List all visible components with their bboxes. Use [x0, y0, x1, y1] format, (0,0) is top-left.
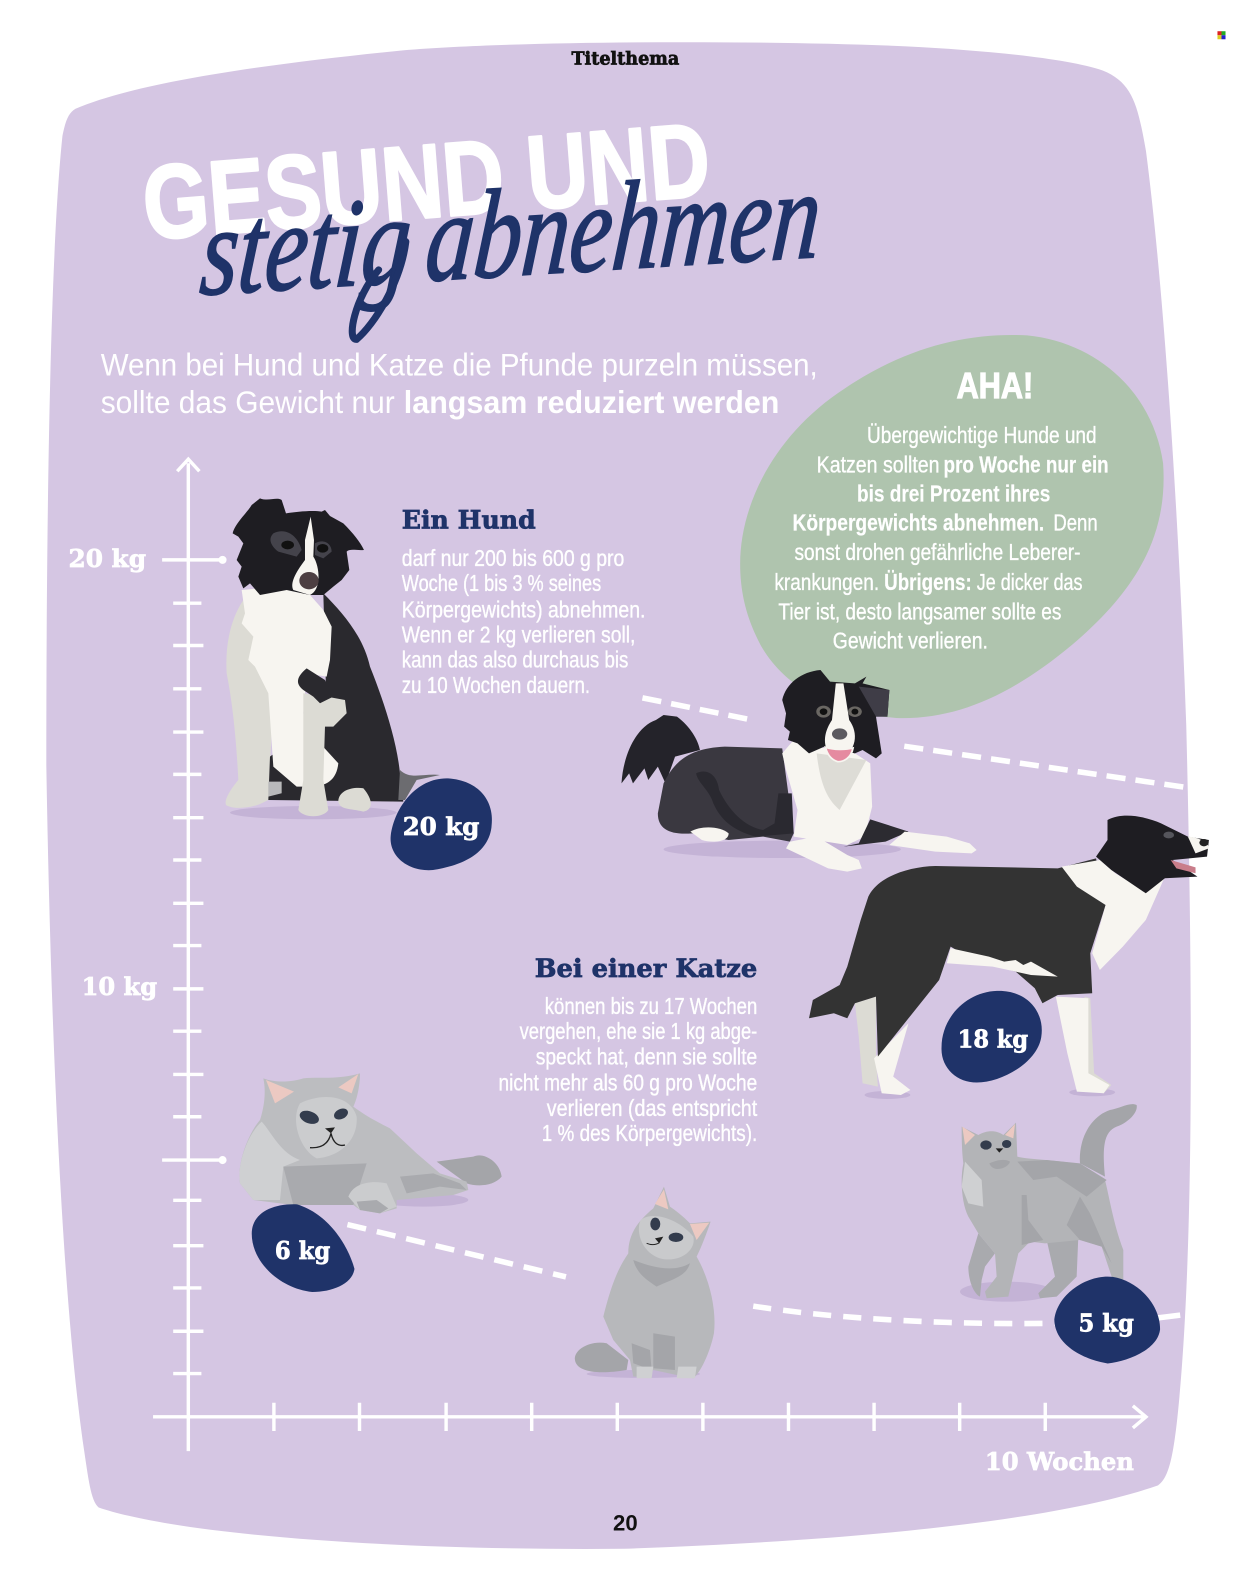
- panel: aha callout: Übrigens:: [884, 569, 972, 595]
- panel: aha callout: Übergewichtige Hunde und: [867, 422, 1097, 448]
- heading: Bei einer Katze: Bei einer Katze: [535, 953, 757, 983]
- text block: dog: [402, 545, 645, 698]
- text block: dog: Wenn er 2 kg verlieren soll,: [402, 621, 635, 647]
- badge: 6 kg: 6 kg: [275, 1236, 330, 1265]
- badge: 5 kg: 5 kg: [1078, 1308, 1134, 1337]
- axis label: 10 Wochen: 10 Wochen: [985, 1447, 1134, 1476]
- text block: dog: darf nur 200 bis 600 g pro: [402, 545, 624, 571]
- intro text: Wenn bei Hund und Katze die Pfunde purzeln müssen,: [101, 348, 818, 383]
- panel: aha callout: AHA!: [957, 365, 1033, 406]
- illustration: lying cat: [239, 1073, 502, 1213]
- badge: 18 kg: [942, 991, 1042, 1083]
- illustration: standing cat: [960, 1104, 1137, 1302]
- badge: 18 kg: 18 kg: [958, 1024, 1028, 1053]
- text block: cat: speckt hat, denn sie sollte: [536, 1043, 757, 1069]
- panel: aha callout: sonst drohen gefährliche Leberer-: [795, 539, 1081, 565]
- panel: aha callout: Je dicker das: [977, 569, 1083, 595]
- panel: aha callout: [740, 335, 1164, 718]
- panel: aha callout: Tier ist, desto langsamer sollte es: [778, 598, 1061, 624]
- intro text: sollte das Gewicht nur: [101, 385, 395, 420]
- text block: cat: können bis zu 17 Wochen: [545, 993, 757, 1019]
- title: script line: stetig: [196, 170, 416, 323]
- colour marks: [1217, 31, 1226, 39]
- panel: aha callout: Katzen sollten: [817, 451, 940, 477]
- illustration: lying dog: [621, 670, 977, 872]
- text block: cat: 1 % des Körpergewichts).: [542, 1120, 757, 1146]
- title: white line: GESUND UND: [139, 101, 714, 263]
- text block: dog: Woche (1 bis 3 % seines: [402, 570, 601, 596]
- text block: dog: zu 10 Wochen dauern.: [402, 672, 590, 698]
- title: script line: [196, 145, 826, 323]
- intro text: [101, 348, 818, 420]
- badge: 20 kg: 20 kg: [403, 812, 479, 841]
- panel: aha callout: krankungen.: [774, 569, 879, 595]
- dashed line: dog trend: [642, 698, 1186, 787]
- illustration: standing dog: [809, 816, 1209, 1099]
- axis label: 20 kg: 20 kg: [68, 544, 146, 573]
- axis label: 10 kg: 10 kg: [82, 972, 157, 1001]
- panel: aha callout: Körpergewichts abnehmen.: [793, 510, 1044, 536]
- y axis: [162, 459, 227, 1451]
- badge: 5 kg: [1054, 1277, 1160, 1363]
- text block: cat: vergehen, ehe sie 1 kg abge-: [520, 1018, 757, 1044]
- illustration: sitting dog: [226, 498, 440, 819]
- text block: dog: Körpergewichts) abnehmen.: [402, 596, 645, 622]
- text block: dog: kann das also durchaus bis: [402, 647, 628, 673]
- panel: aha callout: bis drei Prozent ihres: [857, 480, 1050, 506]
- title: script line: abnehmen: [421, 145, 826, 309]
- badge: 6 kg: [252, 1204, 354, 1292]
- x axis: [153, 1403, 1146, 1431]
- section label: Titelthema: [571, 48, 679, 69]
- illustration: sitting cat: [575, 1187, 715, 1378]
- title swash: g descender: [352, 242, 406, 339]
- page number: 20: [613, 1511, 638, 1536]
- panel: aha callout: pro Woche nur ein: [944, 451, 1109, 477]
- text block: cat: [498, 993, 758, 1146]
- panel: aha callout: Gewicht verlieren.: [833, 628, 988, 654]
- panel: aha callout: Denn: [1053, 510, 1098, 536]
- dashed line: cat trend: [347, 1225, 1180, 1324]
- text block: cat: nicht mehr als 60 g pro Woche: [498, 1070, 757, 1096]
- badge: 20 kg: [391, 778, 492, 870]
- text block: cat: verlieren (das entspricht: [547, 1095, 758, 1121]
- heading: Ein Hund: Ein Hund: [402, 505, 536, 535]
- intro text: langsam reduziert werden: [404, 385, 779, 420]
